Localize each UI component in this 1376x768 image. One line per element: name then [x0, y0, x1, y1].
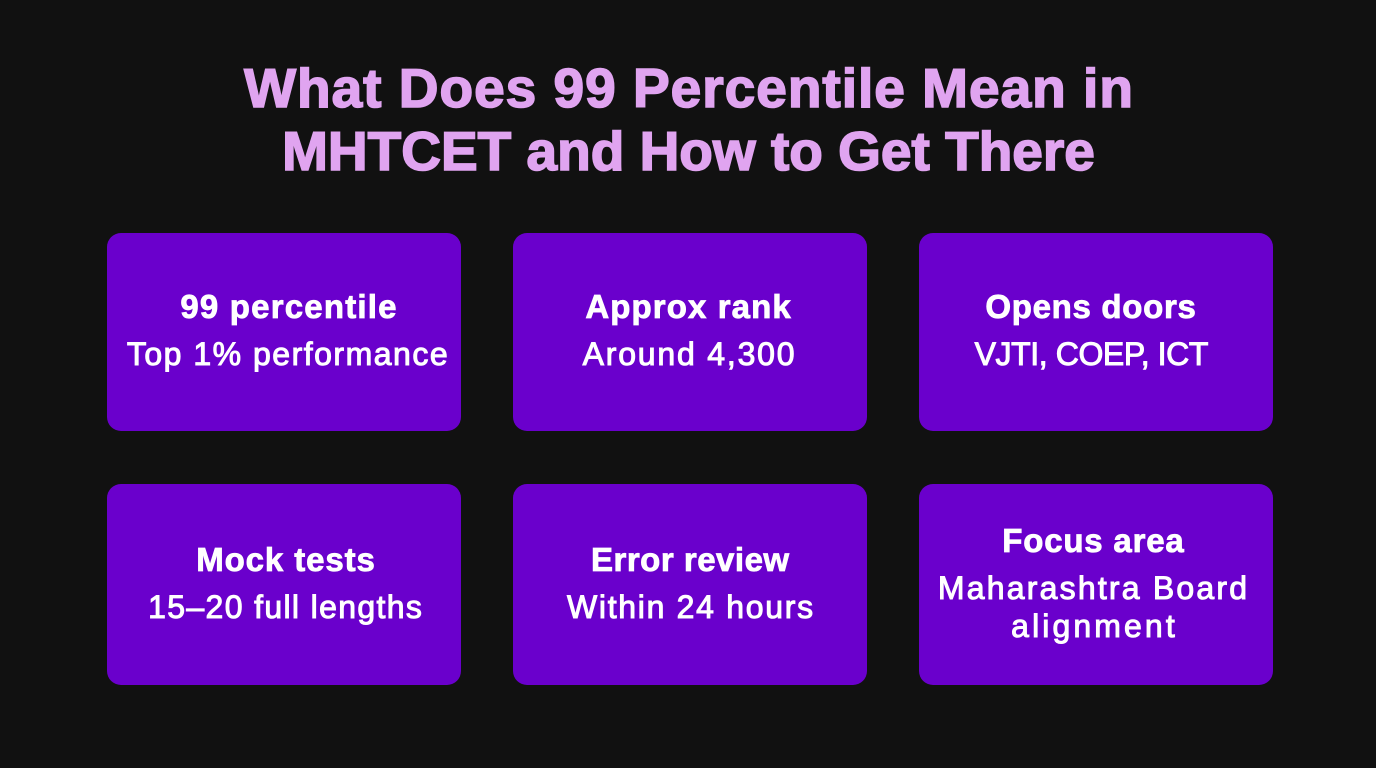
panel: 99 percentile: 99 percentile — [180, 288, 398, 325]
panel: approx rank: Approx rank — [585, 288, 792, 325]
panel: opens doors — [919, 233, 1273, 431]
panel: focus area: alignment — [1011, 608, 1178, 644]
panel: error review — [513, 484, 867, 685]
panel: 99 percentile: Top 1% performance — [127, 336, 449, 372]
panel: focus area — [919, 484, 1273, 685]
panel: approx rank — [513, 233, 867, 431]
title: What Does 99 Percentile Mean in — [244, 57, 1134, 119]
panel: error review: Within 24 hours — [567, 589, 815, 625]
title: MHTCET and How to Get There — [282, 120, 1095, 182]
panel: mock tests: Mock tests — [196, 541, 376, 578]
panel: mock tests — [107, 484, 461, 685]
panel: opens doors: VJTI, COEP, ICT — [975, 336, 1208, 372]
panel: mock tests: 15–20 full lengths — [148, 589, 423, 625]
panel: opens doors: Opens doors — [985, 288, 1197, 325]
title — [243, 57, 1134, 182]
panel: focus area: Focus area — [1002, 522, 1185, 559]
panel: error review: Error review — [591, 541, 790, 578]
panel: 99 percentile — [107, 233, 461, 431]
panel: focus area: Maharashtra Board — [938, 570, 1249, 606]
panel: approx rank: Around 4,300 — [583, 336, 796, 372]
